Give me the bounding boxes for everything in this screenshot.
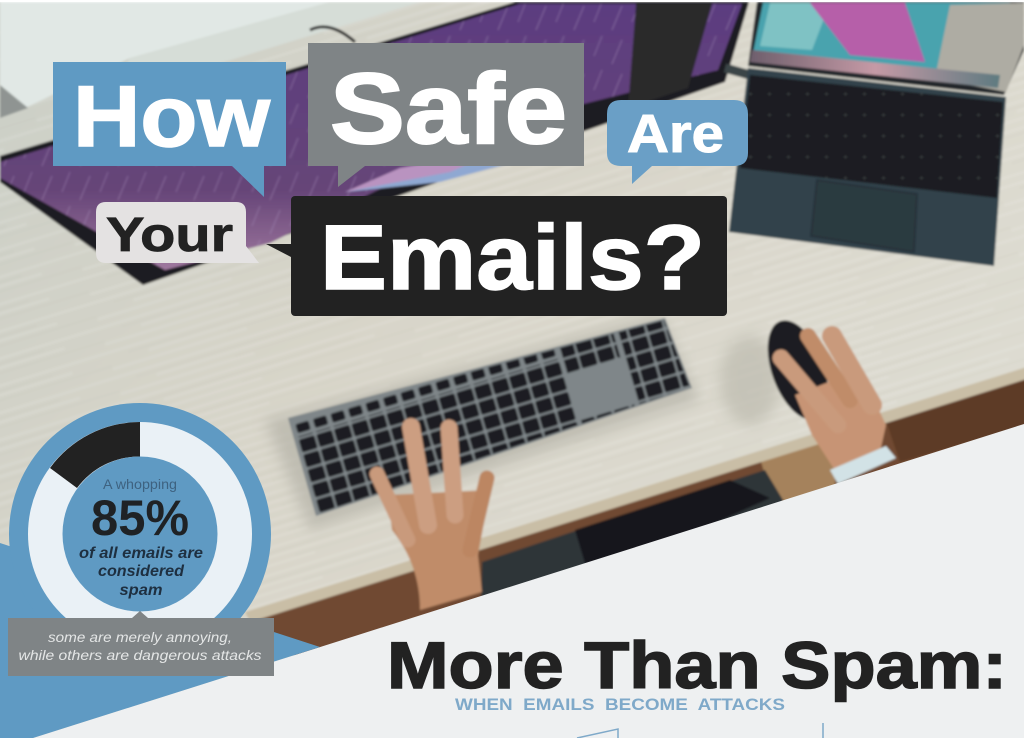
donut text: considered (98, 563, 185, 580)
floor under the desk (250, 376, 1024, 660)
blue accent triangle (0, 543, 320, 738)
white object top left (0, 2, 330, 108)
monitor (0, 2, 749, 285)
desk front edge (245, 366, 1024, 622)
callout: annoying or dangerous: some are merely annoying, (48, 629, 232, 645)
seated person's legs (480, 470, 795, 640)
keyboard (288, 317, 692, 516)
title bubble: How: How (73, 69, 271, 165)
title bubble: Emails? (266, 196, 727, 316)
donut text (79, 476, 203, 599)
donut white segment (28, 422, 252, 646)
mouse (756, 312, 840, 428)
left hand (377, 427, 490, 610)
right hand (781, 336, 896, 484)
laptop (729, 2, 1024, 266)
callout: annoying or dangerous: while others are dangerous attacks (18, 647, 262, 663)
donut outer ring (9, 403, 271, 665)
title bubble: Are (607, 100, 748, 184)
donut centre (62, 456, 218, 612)
donut text: of all emails are (79, 545, 203, 562)
donut black segment (50, 422, 140, 488)
title bubble: How (53, 62, 286, 197)
title bubble: Safe: Safe (330, 53, 567, 165)
top white strip (0, 0, 1024, 2)
section subheading: WHEN EMAILS BECOME ATTACKS (455, 695, 785, 714)
donut text: A whopping (103, 476, 177, 492)
title bubble: Your: Your (106, 209, 233, 262)
mouse shadow (720, 335, 780, 425)
donut text: 85% (91, 490, 189, 546)
callout: annoying or dangerous (8, 611, 274, 676)
white lower panel (33, 424, 1024, 738)
title bubble: Your (96, 202, 259, 263)
title bubble: Safe (308, 43, 584, 187)
donut chart: 85% spam (9, 403, 271, 665)
trackpad (811, 180, 917, 252)
laptop screen (748, 2, 1024, 95)
laptop deck (729, 68, 1006, 266)
monitor stand cable (310, 27, 355, 42)
partial icon outlines below the heading (577, 723, 823, 738)
title bubble: Are: Are (627, 104, 724, 164)
keyboard shadow (265, 315, 700, 530)
donut text: spam (120, 582, 163, 599)
title bubble: Emails?: Emails? (320, 207, 705, 309)
section heading: More Than Spam: (387, 628, 1007, 702)
